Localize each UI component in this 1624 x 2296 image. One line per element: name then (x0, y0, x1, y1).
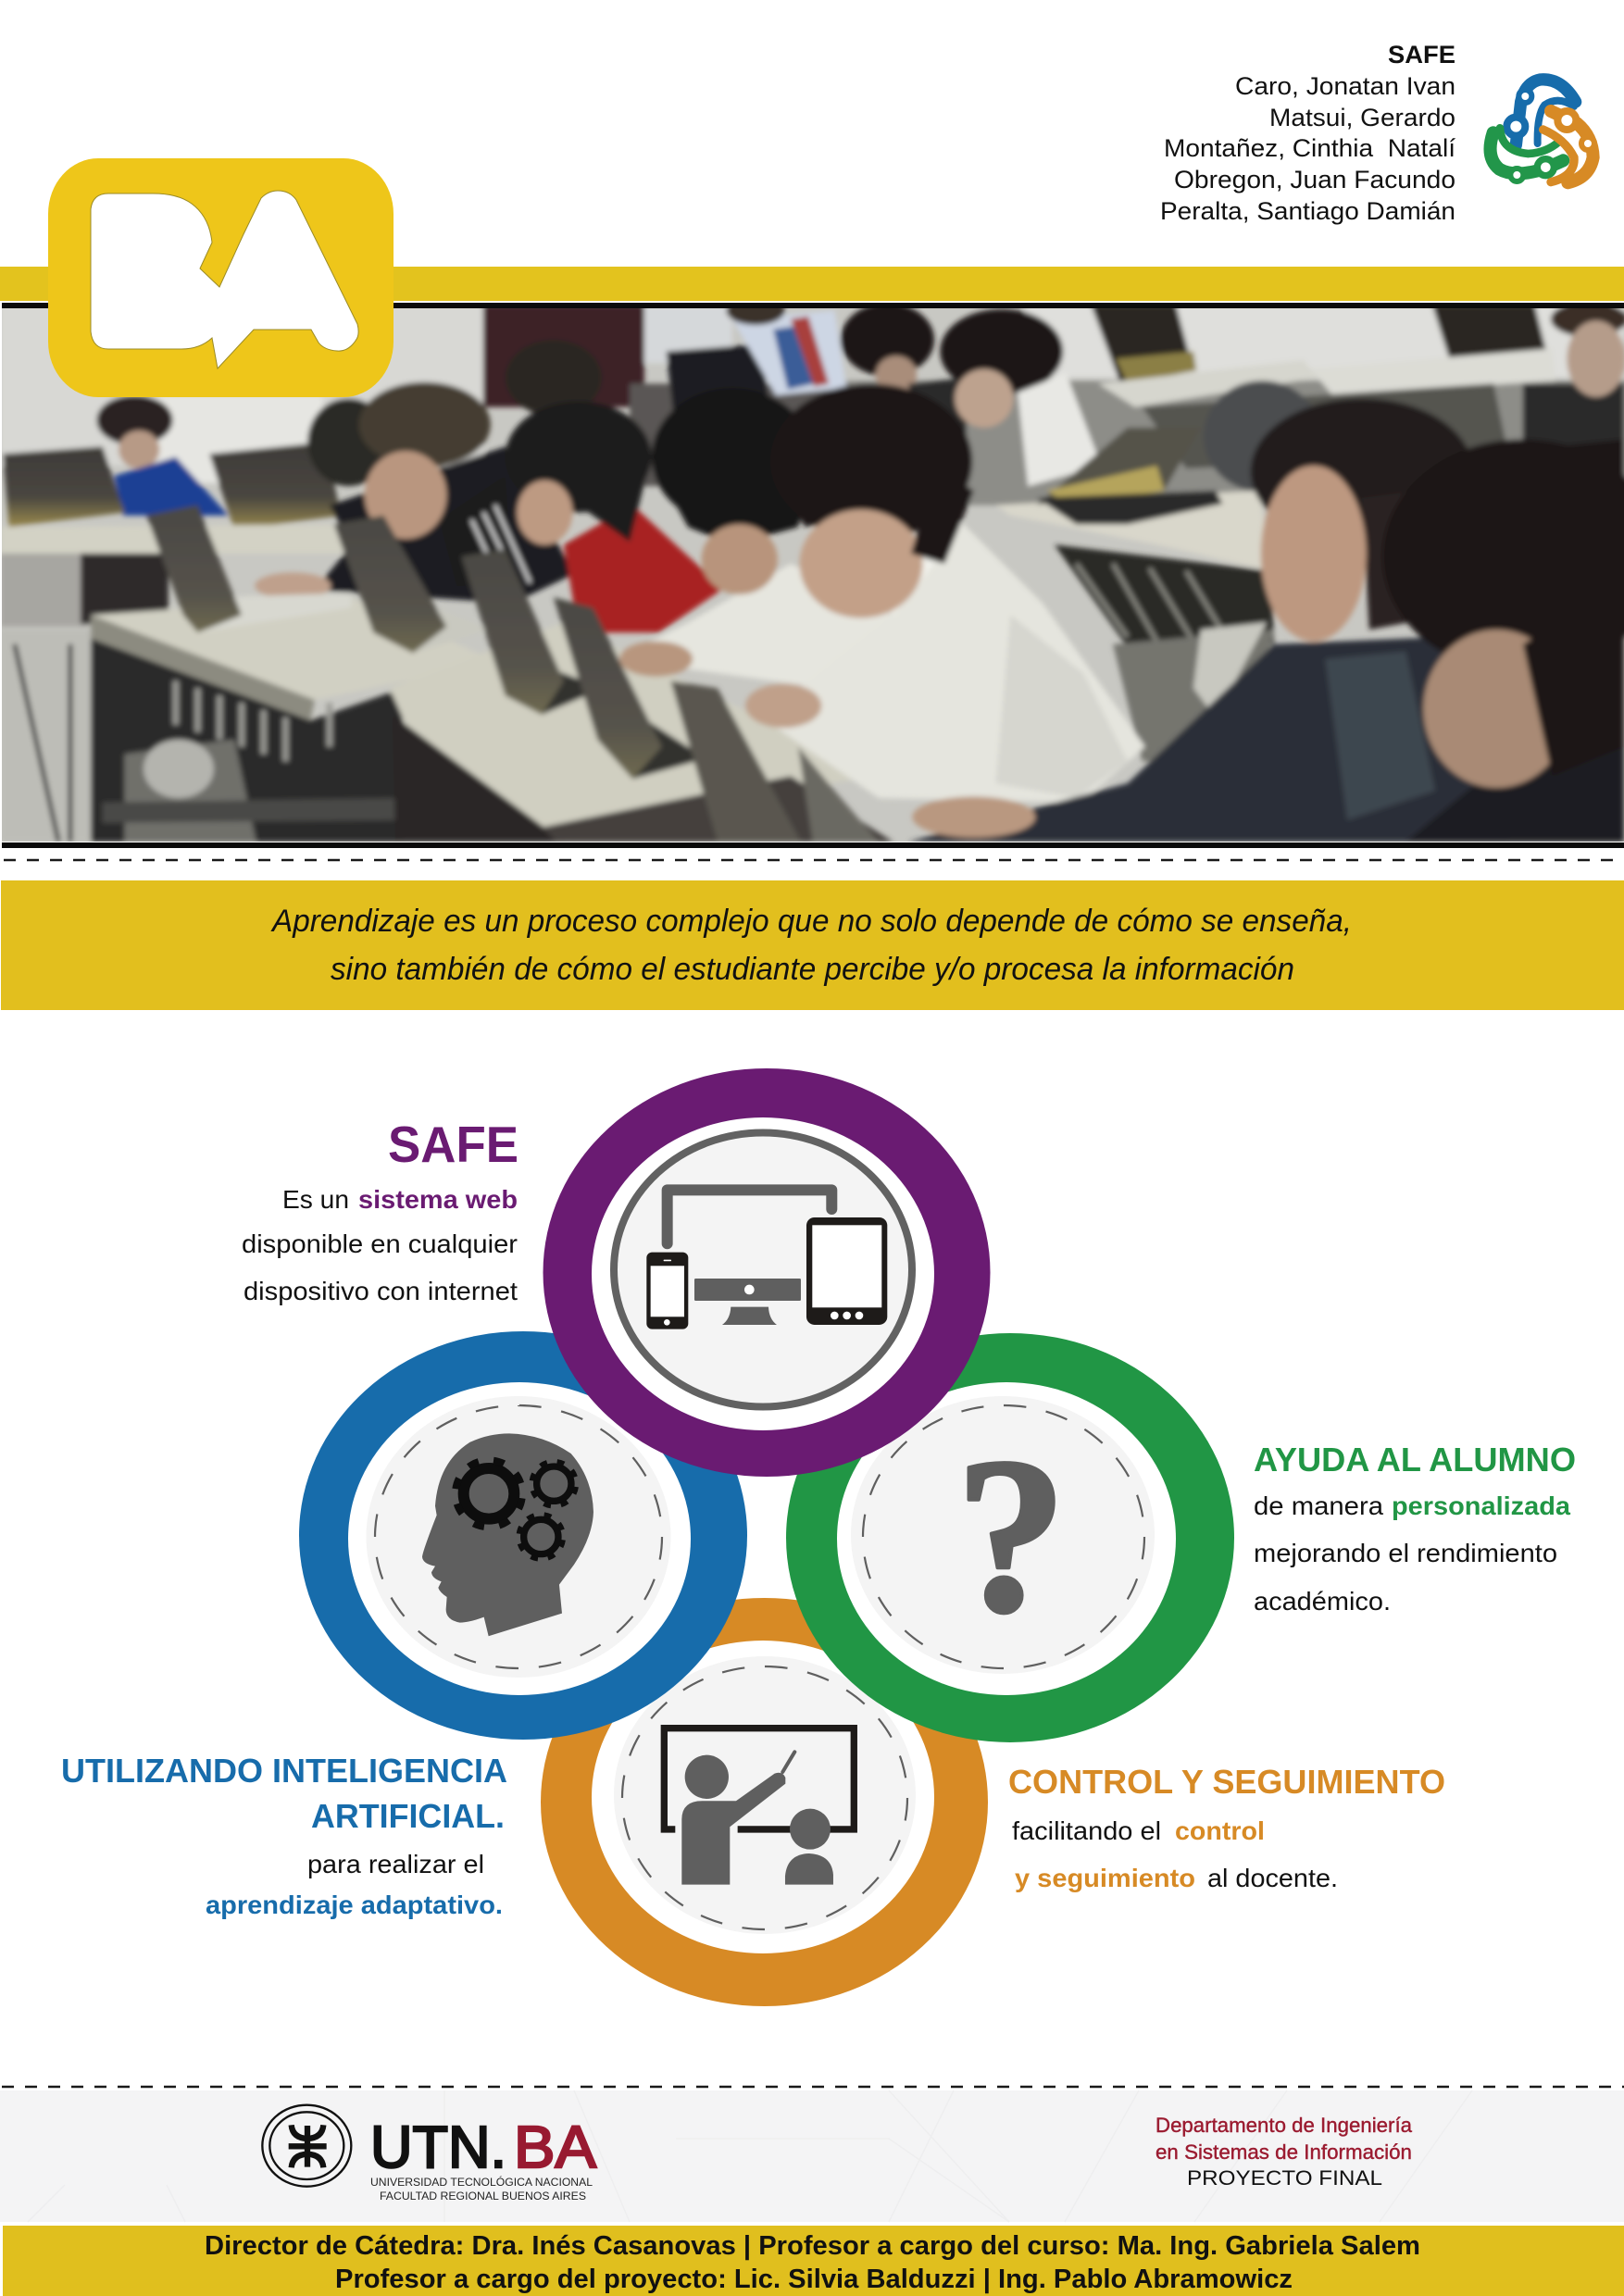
hands (619, 642, 693, 677)
text block: ayuda al alumno: académico. (1254, 1587, 1391, 1616)
footer institution panel (0, 2090, 1624, 2222)
icon: SAFE triple-ring logo (1491, 80, 1594, 182)
circle: green, question mark (786, 1333, 1234, 1742)
team credits: Peralta, Santiago Damián (1160, 197, 1455, 225)
text block: SAFE: dispositivo con internet (244, 1277, 518, 1305)
UTN emblem (262, 2105, 351, 2187)
footer credits band (3, 2226, 1624, 2296)
circle: orange, teacher (541, 1598, 988, 2006)
yellow header band (0, 267, 1624, 301)
team credits: Obregon, Juan Facundo (1174, 166, 1455, 193)
front row laptops (198, 593, 352, 632)
team credits: Caro, Jonatan Ivan (1235, 72, 1455, 100)
text block: inteligencia artificial: para realizar el (307, 1850, 484, 1878)
footer credits band: Profesor a cargo del proyecto: Lic. Silvia Balduzzi | Ing. Pablo Abramowicz (335, 2265, 1293, 2294)
left kids in dark jacket and hair behind (307, 398, 390, 486)
back row kids (667, 344, 768, 418)
black rule below photo (2, 842, 1624, 848)
UTN.BA wordmark: BA (514, 2114, 596, 2180)
girl in red (564, 505, 723, 632)
UTN.BA wordmark: UNIVERSIDAD TECNOLÓGICA NACIONAL (370, 2177, 593, 2189)
circle: purple, devices (543, 1068, 991, 1477)
heading: ayuda al alumno: AYUDA AL ALUMNO (1254, 1441, 1576, 1479)
heading: utilizando inteligencia artificial: UTILIZANDO INTELIGENCIA (61, 1752, 507, 1790)
text block: inteligencia artificial (61, 1752, 507, 1919)
quote band: Aprendizaje es un proceso complejo que no solo depende de cómo se enseña, (270, 904, 1352, 939)
department text: PROYECTO FINAL (1187, 2166, 1382, 2190)
heading: SAFE: SAFE (388, 1116, 518, 1173)
text block: SAFE: disponible en cualquier (242, 1229, 518, 1258)
far right boy (1405, 740, 1624, 842)
table front-left (91, 597, 498, 700)
table front-center (386, 620, 839, 831)
quote band (1, 880, 1624, 1010)
department text: en Sistemas de Información (1156, 2140, 1412, 2164)
right boy (908, 637, 1508, 842)
icon: teacher at board (664, 1728, 854, 1885)
icon: responsive devices (646, 1190, 887, 1329)
team credits: SAFE (1388, 41, 1455, 69)
department text: Departamento de Ingeniería (1156, 2114, 1413, 2137)
text block: ayuda al alumno (1254, 1441, 1576, 1616)
text block: SAFE (242, 1116, 518, 1305)
heading: utilizando inteligencia artificial: ARTIFICIAL. (311, 1797, 505, 1835)
text block: control y seguimiento: control (1175, 1816, 1265, 1845)
team credits (1160, 41, 1456, 225)
left wall kid (96, 395, 173, 445)
black rule above photo (2, 303, 1624, 308)
heading: utilizando inteligencia artificial (61, 1752, 507, 1835)
UTN.BA wordmark (370, 2114, 596, 2202)
team credits: Matsui, Gerardo (1269, 104, 1455, 131)
top right laptops and tables (1091, 305, 1193, 383)
back wall (0, 305, 483, 466)
BA logo (48, 158, 394, 397)
dashed divider (4, 859, 1624, 861)
dashed divider (2, 2086, 1624, 2088)
UTN.BA wordmark: FACULTAD REGIONAL BUENOS AIRES (380, 2191, 586, 2202)
text block: control y seguimiento: y seguimiento (1015, 1864, 1195, 1892)
text block: inteligencia artificial: aprendizaje adaptativo. (206, 1890, 503, 1919)
footer credits band: Director de Cátedra: Dra. Inés Casanovas | Profesor a cargo del curso: Ma. Ing. Gabriela Salem (205, 2231, 1420, 2261)
right back table (995, 491, 1271, 571)
text block: SAFE: sistema web (358, 1185, 518, 1214)
text block: control y seguimiento: facilitando el (1012, 1816, 1161, 1845)
classroom photo (0, 295, 1624, 842)
back-left table (0, 524, 344, 554)
icon: head with gears (422, 1433, 593, 1636)
text block: ayuda al alumno: de manera (1254, 1491, 1384, 1520)
quote band: sino también de cómo el estudiante percibe y/o procesa la información (331, 952, 1294, 987)
back-left laptops (3, 446, 124, 527)
icon: question mark: ? (956, 1412, 1067, 1658)
UTN.BA wordmark: UTN. (370, 2114, 506, 2180)
text block: ayuda al alumno: mejorando el rendimiento (1254, 1539, 1557, 1567)
text block: control y seguimiento: al docente. (1207, 1864, 1338, 1892)
department text (1156, 2114, 1413, 2190)
white coat boys (652, 563, 891, 687)
heading: control y seguimiento: CONTROL Y SEGUIMIENTO (1008, 1763, 1445, 1801)
text block: control y seguimiento (1008, 1763, 1445, 1892)
text block: ayuda al alumno: personalizada (1392, 1491, 1571, 1520)
circle: blue, head with gears (299, 1331, 747, 1740)
team credits: Montañez, Cinthia Natalí (1164, 134, 1456, 162)
text block: SAFE: Es un (282, 1185, 349, 1214)
right laptop (1037, 428, 1201, 505)
